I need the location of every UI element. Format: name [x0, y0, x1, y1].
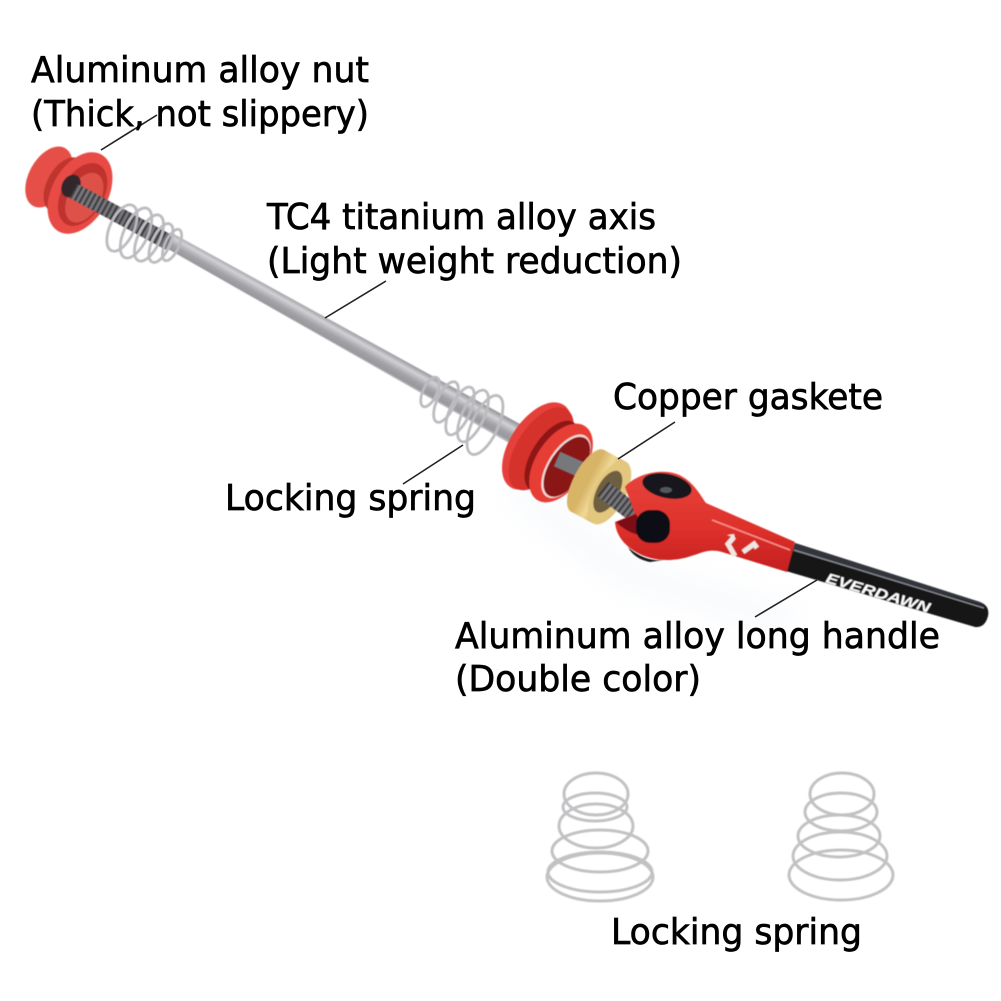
knurled back knob: [16, 138, 82, 216]
label: light weight reduction: (Light weight reduction): [267, 241, 682, 282]
label: locking spring: Locking spring: [225, 478, 476, 519]
label: titanium axis: TC4 titanium alloy axis: [266, 197, 656, 238]
cam slot: [636, 510, 670, 543]
icon: aluminum alloy nut: [16, 138, 126, 245]
icon: second red nut: [488, 390, 606, 514]
under-lever shadow: [628, 547, 664, 562]
label: copper gasket: Copper gaskete: [613, 377, 883, 418]
soft product shadow: [510, 480, 800, 630]
icon: copper gasket: [559, 443, 640, 531]
handle brand text: EVERDAWN: [824, 570, 933, 616]
icon: titanium alloy axis: [165, 231, 525, 446]
label: aluminum alloy nut: Aluminum alloy nut: [31, 50, 369, 91]
nut hole: [57, 171, 85, 201]
icon: threaded end of titanium axis: [69, 184, 174, 250]
callout line: centre spring: [403, 445, 463, 484]
icon: left spring on axis: [101, 200, 186, 266]
black handle end: [786, 543, 988, 627]
label: thick, not slippery: (Thick, not slippery): [31, 94, 369, 135]
callout line: gasket: [618, 422, 675, 459]
icon: axis inside nut: [554, 452, 589, 479]
icon: thread into handle: [597, 482, 642, 522]
callout line: axis: [325, 281, 386, 318]
icon: double colour long handle: [615, 469, 988, 627]
front flange: [34, 141, 126, 245]
label: double color: (Double color): [455, 659, 701, 700]
icon: centre spring on axis: [417, 375, 510, 459]
icon: loose conical spring left: [547, 773, 653, 901]
lever slot interior: [616, 514, 648, 537]
label: long handle: Aluminum alloy long handle: [455, 616, 940, 657]
label: bottom locking spring: Locking spring: [611, 912, 862, 953]
logo chevrons: [728, 537, 757, 556]
red lever head: [615, 472, 795, 572]
bolt hole: [640, 469, 694, 503]
callout line: handle: [755, 580, 817, 617]
waist of nut: [35, 150, 95, 220]
icon: loose conical spring right: [789, 773, 893, 900]
callout line: nut: [101, 115, 157, 150]
